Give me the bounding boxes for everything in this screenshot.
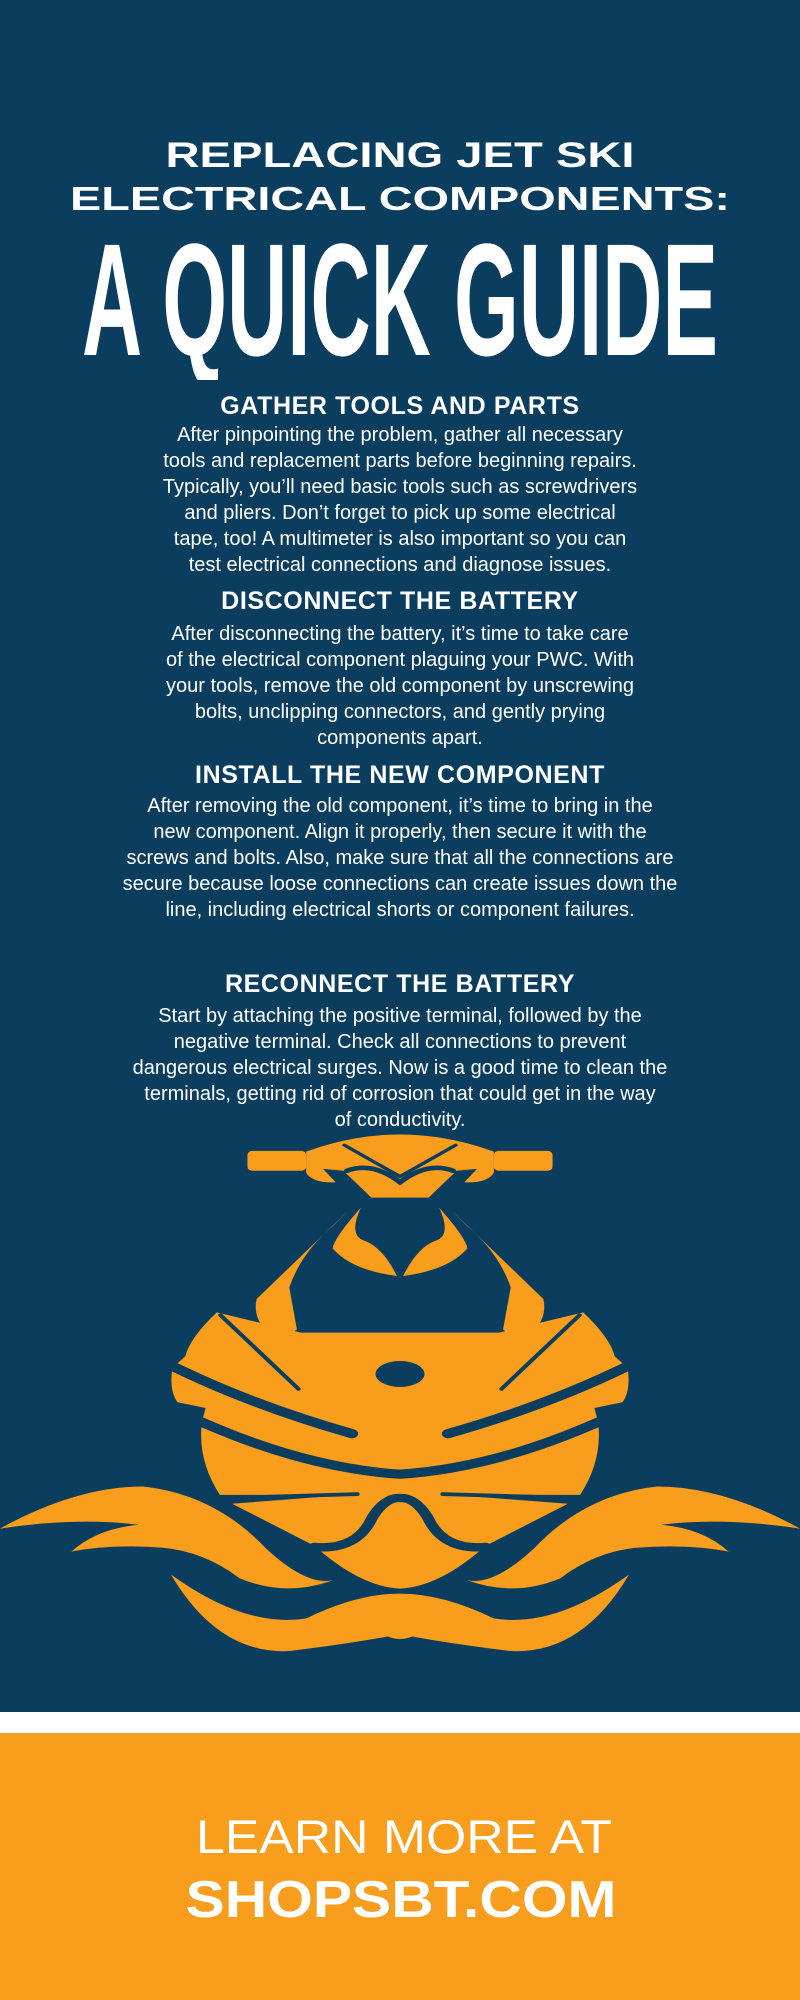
text: disconnect [166, 623, 634, 749]
text: disconnect: bolts, unclipping connectors, and gently prying [195, 701, 605, 723]
text: install: line, including electrical shorts or component failures. [165, 899, 635, 921]
text: reconnect: Start by attaching the positive terminal, followed by the [158, 1005, 642, 1027]
title [70, 136, 730, 380]
text: reconnect: dangerous electrical surges. Now is a good time to clean the [133, 1057, 667, 1079]
title: ELECTRICAL COMPONENTS: [70, 180, 730, 217]
text: reconnect: of conductivity. [335, 1109, 465, 1131]
text: disconnect: your tools, remove the old component by unscrewing [166, 675, 634, 697]
text: reconnect [133, 1005, 667, 1131]
icon: jet ski [0, 1134, 800, 1652]
heading: reconnect: RECONNECT THE BATTERY [225, 970, 575, 998]
text: reconnect: terminals, getting rid of corrosion that could get in the way [144, 1083, 656, 1105]
text: install: new component. Align it properly, then secure it with the [153, 821, 647, 843]
footer text [186, 1810, 616, 1929]
heading: gather tools: GATHER TOOLS AND PARTS [220, 392, 580, 420]
heading: install: INSTALL THE NEW COMPONENT [195, 761, 605, 789]
text: gather tools: After pinpointing the problem, gather all necessary [177, 424, 623, 446]
text: disconnect: of the electrical component plaguing your PWC. With [166, 649, 634, 671]
text: disconnect: components apart. [317, 727, 483, 749]
text: install: secure because loose connections can create issues down the [123, 873, 677, 895]
text: install [123, 795, 677, 921]
text: gather tools: tools and replacement parts before beginning repairs. [163, 450, 637, 472]
text: gather tools: tape, too! A multimeter is also important so you can [174, 528, 626, 550]
footer text: SHOPSBT.COM [186, 1871, 616, 1929]
text: install: screws and bolts. Also, make sure that all the connections are [127, 847, 673, 869]
text: disconnect: After disconnecting the battery, it’s time to take care [171, 623, 629, 645]
text: reconnect: negative terminal. Check all connections to prevent [174, 1031, 626, 1053]
footer panel [0, 1733, 800, 2000]
text: install: After removing the old component, it’s time to bring in the [147, 795, 653, 817]
text: gather tools: and pliers. Don’t forget to pick up some electrical [184, 502, 616, 524]
footer text: LEARN MORE AT [196, 1810, 612, 1863]
text: gather tools: Typically, you’ll need basic tools such as screwdrivers [163, 476, 637, 498]
title: REPLACING JET SKI [166, 136, 634, 175]
text: gather tools [163, 424, 637, 576]
text: gather tools: test electrical connections and diagnose issues. [189, 554, 611, 576]
heading: disconnect: DISCONNECT THE BATTERY [221, 587, 579, 615]
divider band [0, 1712, 800, 1733]
